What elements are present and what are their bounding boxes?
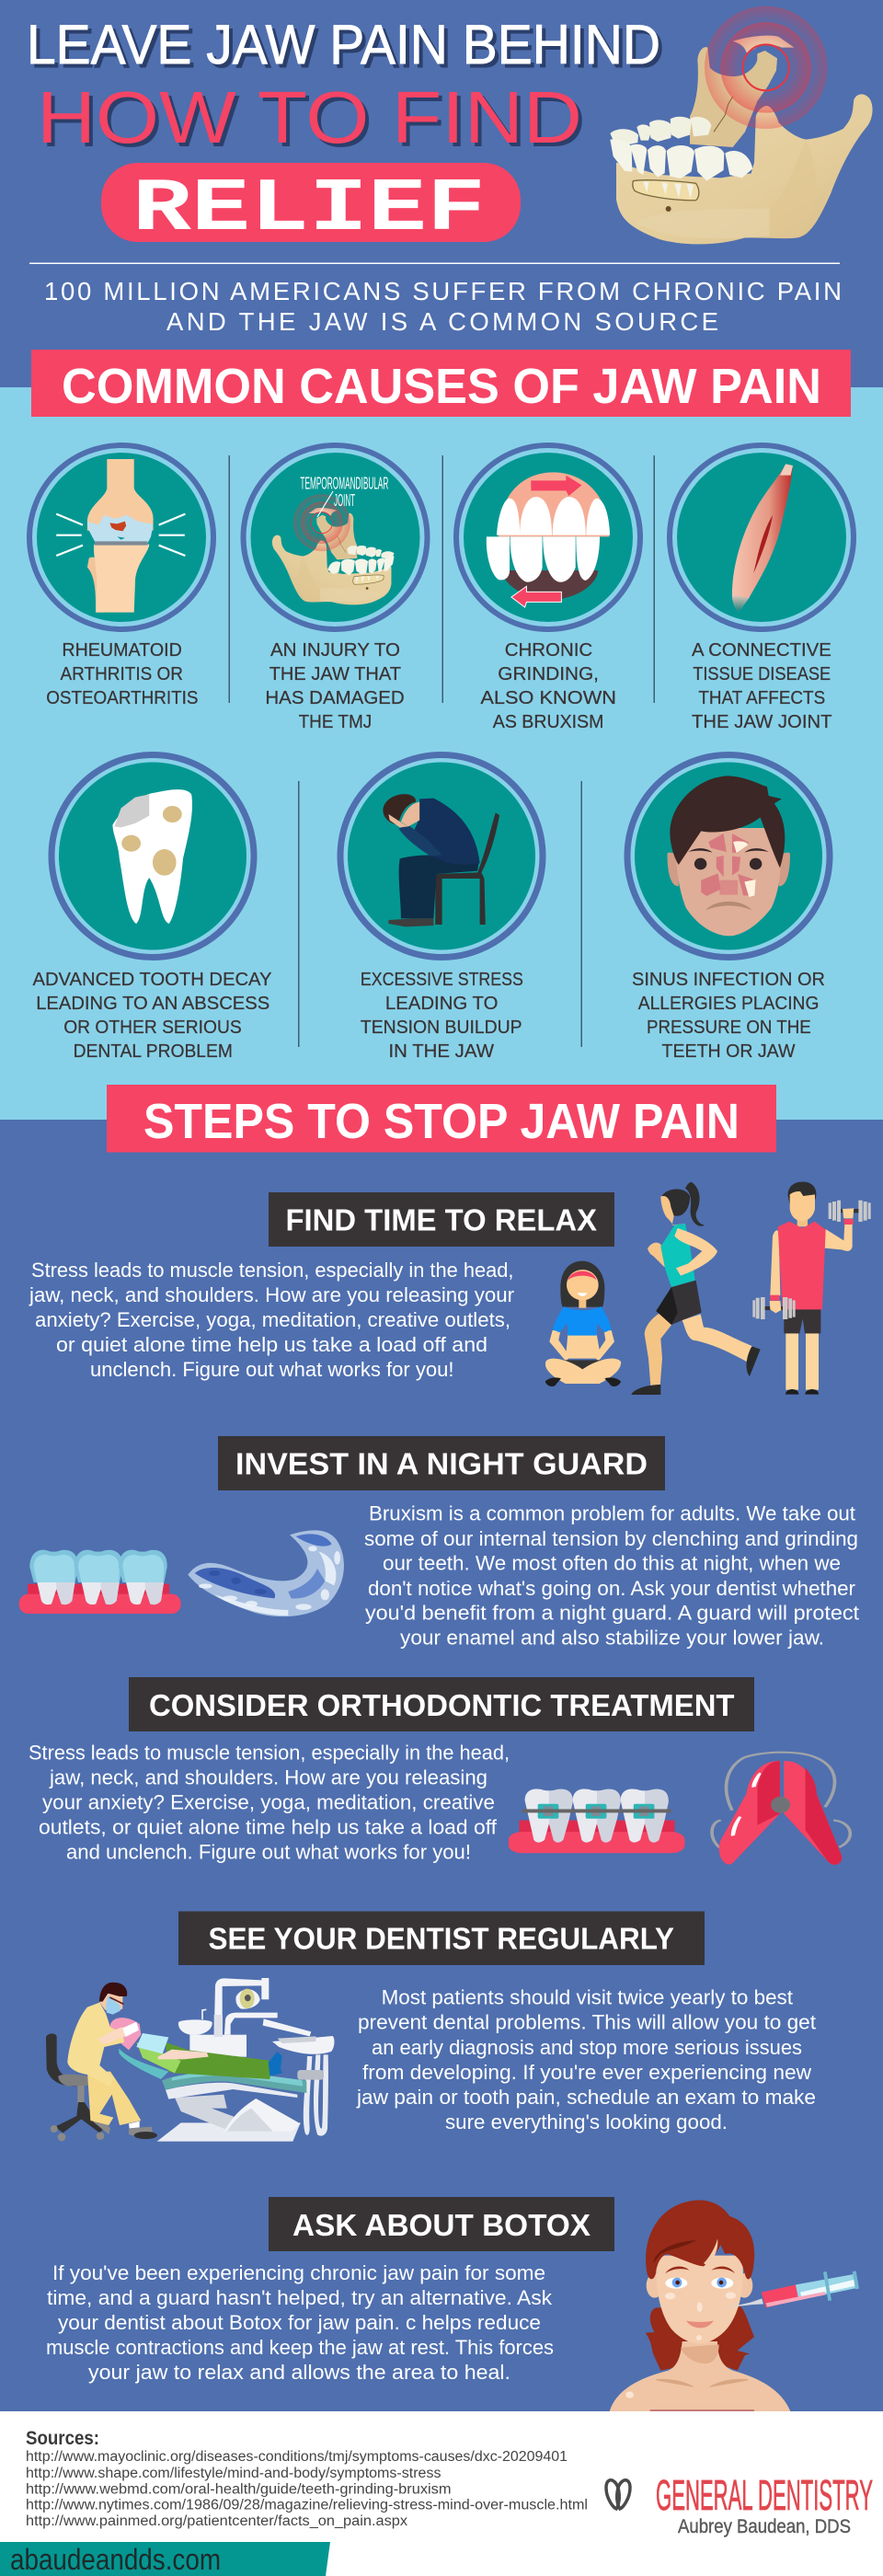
divider line — [29, 263, 840, 264]
relief pill: RELIEF — [132, 167, 486, 252]
icon: stressed man on chair — [340, 754, 543, 957]
step 2: invest in a night guard — [19, 1436, 860, 1649]
label — [480, 639, 616, 732]
step body text: and unclench. Figure out what works for you! — [66, 1840, 471, 1864]
label — [692, 639, 832, 732]
step body text: Most patients should visit twice yearly to best — [382, 1986, 794, 2009]
label: A CONNECTIVE — [692, 639, 831, 661]
step body text — [364, 1501, 860, 1649]
label: DENTAL PROBLEM — [74, 1041, 233, 1062]
icon: boy with sinus pain — [627, 754, 830, 957]
step body text: you'd benefit from a night guard. A guard will protect — [365, 1601, 860, 1625]
step 4: see your dentist regularly — [46, 1912, 817, 2142]
step heading: FIND TIME TO RELAX — [285, 1203, 597, 1236]
title line: leave jaw pain behind: LEAVE JAW PAIN BEHIND — [27, 14, 660, 75]
step body text: some of our internal tension by clenching and grinding — [364, 1527, 858, 1550]
step heading: SEE YOUR DENTIST REGULARLY — [208, 1922, 674, 1956]
label: IN THE JAW — [388, 1041, 495, 1062]
sources: http://www.shape.com/lifestyle/mind-and-body/symptoms-stress — [26, 2466, 442, 2481]
cause 4: connective tissue disease — [670, 445, 854, 732]
sources — [26, 2428, 588, 2529]
step body text — [356, 1986, 817, 2133]
icon: tooth knot — [606, 2480, 630, 2509]
step body text: your dentist about Botox for jaw pain. c helps reduce — [58, 2311, 541, 2334]
sources: http://www.mayoclinic.org/diseases-conditions/tmj/symptoms-causes/dxc-20209401 — [26, 2449, 568, 2465]
step body text: sure everything's looking good. — [445, 2110, 728, 2133]
step body text: If you've been experiencing chronic jaw pain for some — [52, 2261, 545, 2284]
step 5: ask about botox — [46, 2197, 859, 2411]
label: THE TMJ — [299, 711, 372, 732]
label: EXCESSIVE STRESS — [361, 969, 523, 990]
step body text: our teeth. We most often do this at night, when we — [383, 1551, 841, 1575]
label: PRESSURE ON THE — [647, 1017, 811, 1038]
label — [265, 639, 405, 732]
step body text: jaw, neck, and shoulders. How are you releasing your — [29, 1283, 514, 1306]
step heading: ASK ABOUT BOTOX — [292, 2208, 591, 2242]
step body text: prevent dental problems. This will allow you to get — [358, 2011, 817, 2034]
step heading: INVEST IN A NIGHT GUARD — [235, 1447, 648, 1481]
label: HAS DAMAGED — [265, 687, 405, 708]
dental chair and equipment — [119, 1978, 334, 2142]
step 3: consider orthodontic treatment — [29, 1677, 850, 1865]
cause 3: grinding — [456, 445, 640, 732]
step body text: from developing. If you're ever experiencing new — [362, 2061, 812, 2084]
step body text: Stress leads to muscle tension, especially in the head, — [29, 1741, 510, 1765]
label: LEADING TO AN ABSCESS — [36, 993, 269, 1014]
cause 1: arthritis — [29, 445, 213, 708]
step body text — [46, 2261, 554, 2384]
icon: grinding teeth with arrows — [456, 445, 640, 629]
cause 6: stress — [340, 754, 543, 1062]
step body text: jaw pain or tooth pain, schedule an exam to make — [356, 2086, 816, 2109]
icon: teeth with guard — [19, 1550, 181, 1614]
sources: http://www.webmd.com/oral-health/guide/teeth-grinding-bruxism — [26, 2482, 451, 2497]
illustration: woman with syringe — [610, 2200, 859, 2411]
step body text: your anxiety? Exercise, yoga, meditation, creative — [42, 1790, 495, 1814]
subtitle: 100 MILLION AMERICANS SUFFER FROM CHRONIC PAIN — [44, 277, 842, 305]
label: OSTEOARTHRITIS — [46, 687, 199, 708]
woman — [610, 2200, 790, 2411]
label — [632, 969, 825, 1062]
header: title block — [27, 14, 660, 252]
figure: man with dumbbells — [752, 1182, 871, 1395]
icon: decayed tooth — [52, 754, 254, 957]
logo: general dentistry: Aubrey Baudean, DDS — [678, 2516, 851, 2537]
step body text: your enamel and also stabilize your lower jaw. — [400, 1627, 824, 1649]
label: THE JAW THAT — [269, 663, 401, 684]
heading: steps to stop jaw pain: STEPS TO STOP JAW PAIN — [143, 1094, 740, 1149]
label: ALLERGIES PLACING — [638, 993, 819, 1014]
step body text — [29, 1259, 514, 1381]
label: ALSO KNOWN — [480, 687, 616, 708]
label — [361, 969, 523, 1062]
step body text: time, and a guard hasn't helped, try an alternative. Ask — [47, 2286, 553, 2309]
step heading: CONSIDER ORTHODONTIC TREATMENT — [149, 1688, 734, 1722]
logo: general dentistry — [606, 2471, 873, 2537]
relief pill — [101, 163, 521, 252]
sources: http://www.nytimes.com/1986/09/28/magazine/relieving-stress-mind-over-muscle.html — [26, 2497, 588, 2513]
step heading — [269, 1192, 614, 1247]
label: CHRONIC — [505, 639, 592, 661]
dentist — [46, 1983, 157, 2141]
icon: jaw with temporomandibular joint: JOINT — [334, 491, 355, 510]
illustration: jaw with pain rings — [610, 6, 873, 244]
label: TISSUE DISEASE — [693, 663, 831, 684]
title line: how to find: HOW TO FIND — [37, 76, 582, 158]
cause 5: tooth decay — [33, 754, 272, 1062]
label: ARTHRITIS OR — [61, 663, 183, 684]
label: THE JAW JOINT — [692, 711, 832, 732]
label: THAT AFFECTS — [698, 687, 825, 708]
cause 7: sinus infection — [627, 754, 830, 1062]
step body text: an early diagnosis and stop more serious issues — [372, 2036, 802, 2059]
label: TEETH OR JAW — [662, 1041, 796, 1062]
step heading — [129, 1677, 754, 1731]
sources: Sources: — [26, 2428, 99, 2449]
illustration: dentist treating patient — [46, 1978, 334, 2142]
label: ADVANCED TOOTH DECAY — [33, 969, 272, 990]
step body text: Bruxism is a common problem for adults. We take out — [369, 1501, 856, 1525]
patient — [110, 2018, 282, 2079]
label: OR OTHER SERIOUS — [63, 1017, 242, 1038]
subtitle: AND THE JAW IS A COMMON SOURCE — [166, 307, 718, 336]
icon: teeth with braces — [509, 1789, 684, 1853]
website tab: abaudeandds.com — [10, 2543, 221, 2576]
step heading — [218, 1436, 665, 1490]
illustration: yoga, running, weights figures — [545, 1182, 871, 1395]
step body text: jaw, neck, and shoulders. How are you releasing — [49, 1766, 487, 1788]
icon: jaw with temporomandibular joint: TEMPOROMANDIBULAR — [300, 475, 388, 493]
step body text: or quiet alone time help us take a load off and — [56, 1333, 487, 1356]
cause 2: TMJ injury — [243, 445, 427, 732]
step heading — [178, 1912, 705, 1965]
step body text: unclench. Figure out what works for you! — [90, 1358, 454, 1381]
label: AS BRUXISM — [493, 711, 603, 732]
label: RHEUMATOID — [62, 639, 182, 661]
step body text — [29, 1741, 510, 1864]
icon: muscle — [670, 445, 854, 629]
label: AN INJURY TO — [270, 639, 400, 661]
icon: retainer — [712, 1753, 850, 1865]
label: SINUS INFECTION OR — [632, 969, 825, 990]
step body text: Stress leads to muscle tension, especially in the head, — [31, 1259, 513, 1282]
figure: runner — [632, 1182, 761, 1395]
syringe — [727, 2271, 859, 2307]
sources: http://www.painmed.org/patientcenter/facts_on_pain.aspx — [26, 2513, 407, 2529]
heading: common causes of jaw pain: COMMON CAUSES OF JAW PAIN — [62, 359, 821, 414]
icon: clear night guard — [188, 1530, 344, 1616]
label: LEADING TO — [385, 993, 498, 1014]
step heading — [269, 2197, 614, 2251]
label: TENSION BUILDUP — [361, 1017, 522, 1038]
step body text: your jaw to relax and allows the area to heal. — [88, 2361, 510, 2384]
panel background — [0, 387, 883, 1120]
label: GRINDING, — [498, 663, 599, 684]
step 1: find time to relax — [29, 1182, 871, 1395]
subtitle — [44, 277, 842, 336]
panel: common causes — [0, 350, 883, 1120]
footer band — [0, 2411, 883, 2576]
label — [46, 639, 199, 708]
step body text: anxiety? Exercise, yoga, meditation, creative outlets, — [35, 1308, 510, 1331]
step body text: muscle contractions and keep the jaw at rest. This forces — [46, 2336, 554, 2359]
step body text: outlets, or quiet alone time help us take a load off — [39, 1816, 498, 1838]
icon: jaw with temporomandibular joint — [243, 445, 427, 629]
label — [33, 969, 272, 1062]
icon: knee joint — [29, 445, 213, 629]
figure: sitting girl — [545, 1261, 621, 1386]
step body text: don't notice what's going on. Ask your dentist whether — [368, 1577, 855, 1600]
